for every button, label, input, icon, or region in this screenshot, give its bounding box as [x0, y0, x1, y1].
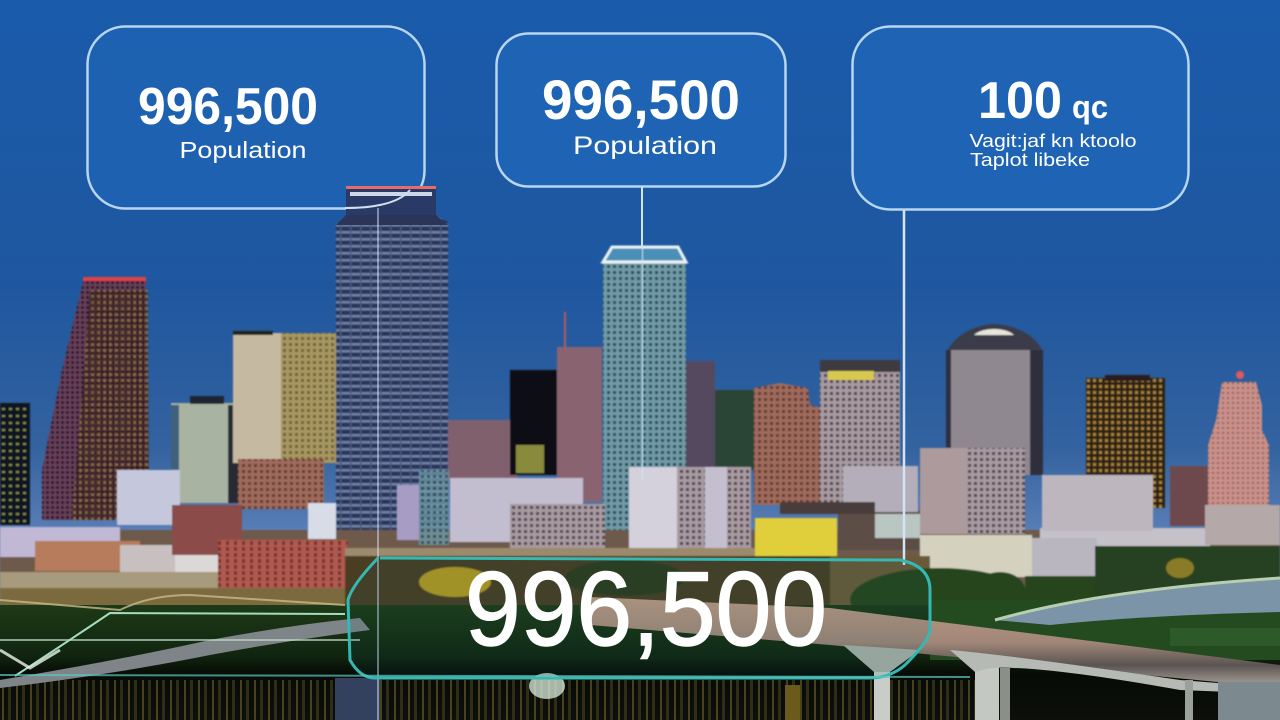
value: 100: [978, 72, 1062, 130]
small brick right: [1170, 466, 1210, 526]
pale glass tower: [171, 396, 239, 503]
label: Population: [180, 137, 306, 163]
low brick block: [238, 459, 324, 509]
base fill behind low-rises: [0, 510, 1280, 600]
dark tapered tower with red top: [42, 277, 149, 520]
left bridge: [0, 595, 370, 688]
mauve slim tower: [557, 312, 602, 502]
piers: [874, 665, 890, 720]
mid low-rise: pale blocks: [397, 448, 1280, 550]
callout: right stat: [852, 26, 1188, 210]
connector lines: [345, 187, 904, 720]
river and reflections: [0, 600, 1280, 720]
value: 996,500: [542, 68, 740, 131]
small text: Vagit:jaf kn ktoolo: [970, 131, 1136, 151]
gold tower: [233, 331, 336, 463]
unit: qc: [1072, 89, 1108, 125]
green dark hill building: [715, 390, 755, 470]
black tower: [510, 370, 577, 475]
cream block: [920, 535, 1097, 577]
dark low roof: [780, 502, 875, 514]
amber tower right: [1086, 375, 1165, 508]
round top tower: [946, 324, 1043, 475]
yellow block: [755, 518, 837, 556]
label: Population: [573, 132, 717, 160]
big value: 996,500: [465, 551, 827, 668]
grey crown tower: [820, 360, 900, 505]
near deck: [590, 597, 1280, 688]
pink stepped tower: [1208, 371, 1269, 515]
callout: population left: [88, 26, 424, 208]
callout: population center: [496, 34, 786, 186]
callout: right stat: Taplot libeke: [970, 150, 1090, 170]
low-rise band left: [0, 503, 348, 590]
tall blue tower center-left: [336, 215, 448, 542]
purple tower right of teal: [686, 361, 715, 471]
far overpass: [995, 578, 1280, 625]
tall tower crown: [336, 186, 448, 225]
right bridge: [590, 578, 1280, 720]
value: 996,500: [138, 78, 318, 136]
brick tower: [754, 383, 830, 505]
far left tower: [0, 403, 30, 525]
brick tower behind: [448, 420, 517, 480]
glowing line across water: [0, 675, 970, 677]
low white block left: [117, 470, 180, 525]
teal glass tower: [603, 247, 686, 530]
highlight frame with big number: [348, 551, 930, 678]
city skyline: [0, 215, 1280, 632]
ground / treeline: [0, 546, 1280, 632]
